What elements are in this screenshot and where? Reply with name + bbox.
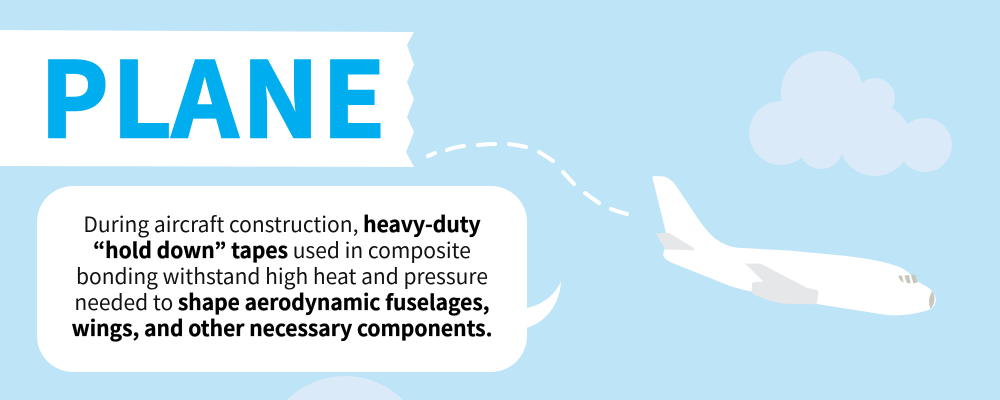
cloud: upper right [749, 51, 952, 176]
dashed flight path [428, 144, 627, 214]
bubble text: During aircraft construction, heavy-duty [83, 209, 481, 239]
bubble text: bonding withstand high heat and pressure [76, 261, 488, 291]
cockpit windows [898, 275, 918, 283]
cloud: bottom [287, 376, 403, 400]
bubble text: wings, and other necessary components. [72, 313, 492, 343]
nose cone [929, 291, 934, 309]
fuselage and tail [652, 176, 936, 315]
bubble text: needed to shape aerodynamic fuselages, [74, 287, 490, 317]
tail stabilizer [656, 233, 694, 250]
title banner [0, 18, 414, 167]
airplane [652, 176, 936, 315]
wing [745, 264, 818, 304]
title: PLANE: PLANE [40, 18, 385, 167]
bubble text: “hold down” tapes used in composite [93, 235, 471, 265]
speech bubble [37, 186, 561, 372]
